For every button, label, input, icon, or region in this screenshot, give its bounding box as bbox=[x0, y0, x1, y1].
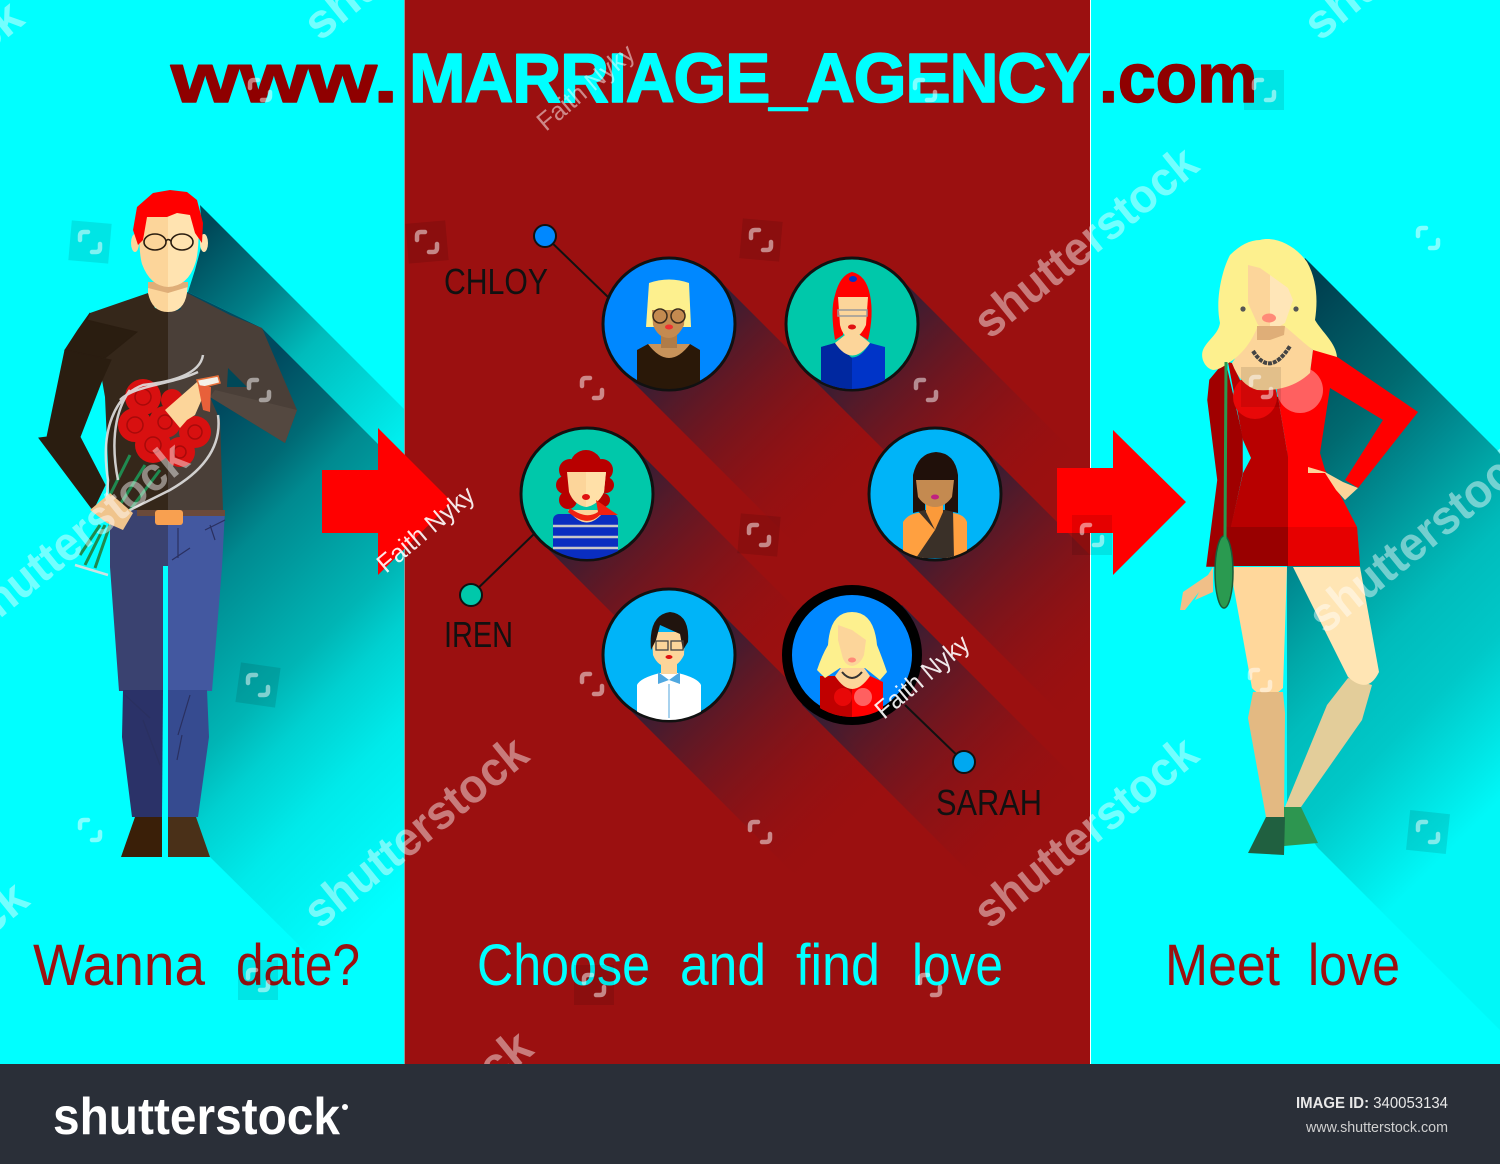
footer bar bbox=[0, 1064, 1500, 1164]
title: .com bbox=[1099, 39, 1257, 117]
label: Chloy: CHLOY bbox=[444, 261, 548, 302]
woman: hair bbox=[1202, 239, 1337, 370]
avatar: dark-haired woman bbox=[869, 428, 1001, 560]
caption: Meet love: love bbox=[1308, 933, 1400, 998]
man: hands and watch bbox=[90, 376, 220, 530]
caption: Wanna date?: date? bbox=[236, 933, 360, 998]
man: glasses bbox=[144, 234, 193, 250]
caption: Wanna date? bbox=[33, 933, 360, 998]
label: Sarah: SARAH bbox=[936, 782, 1042, 823]
arrow: left to centre bbox=[322, 428, 452, 575]
man: shoes bbox=[121, 817, 210, 857]
man: rose bouquet bbox=[75, 355, 219, 575]
figure: woman in red dress bbox=[1180, 239, 1418, 855]
avatar: man with glasses bbox=[603, 589, 735, 722]
avatar: Chloy bbox=[603, 258, 735, 392]
panel: left long shadow bbox=[168, 205, 405, 1050]
footer: registered mark bbox=[342, 1104, 348, 1110]
panel: right long shadow bbox=[1287, 258, 1500, 1030]
caption: Choose and find love: Choose bbox=[477, 933, 650, 998]
connector: Iren bbox=[460, 533, 535, 606]
woman: legs bbox=[1230, 567, 1379, 817]
panel: central dark red bbox=[405, 0, 1090, 1064]
woman: hand on hip bbox=[1308, 467, 1358, 500]
caption: Choose and find love bbox=[477, 933, 1003, 998]
woman: chest and neck bbox=[1232, 325, 1313, 390]
footer: logo: shutterstock bbox=[53, 1088, 340, 1146]
watermark: contributor name: Faith Nyky bbox=[869, 628, 975, 725]
figure: man with flowers bbox=[39, 190, 297, 857]
watermark: square stamps bbox=[68, 70, 1450, 1005]
man: jeans bbox=[110, 510, 225, 817]
arrow: centre to right bbox=[1057, 430, 1186, 575]
watermark: contributor name bbox=[371, 38, 975, 725]
caption: Choose and find love: and bbox=[680, 933, 766, 998]
connector: Sarah bbox=[905, 705, 975, 773]
watermark: stock text overlay: ck bbox=[468, 1020, 543, 1095]
caption: Meet love bbox=[1165, 933, 1400, 998]
watermark: contributor name: Faith Nyky bbox=[371, 480, 480, 579]
avatar: Sarah (selected) bbox=[787, 590, 917, 720]
watermark: stock text overlay: shutterstock bbox=[964, 136, 1209, 349]
label: Iren: IREN bbox=[444, 614, 513, 655]
avatar: Iren bbox=[521, 428, 653, 560]
title bbox=[170, 39, 1257, 117]
caption: Choose and find love: love bbox=[912, 933, 1003, 998]
woman: lower left hand bbox=[1180, 567, 1213, 610]
caption: Choose and find love: find bbox=[796, 933, 880, 998]
man: red hair bbox=[133, 190, 203, 245]
woman: shoes bbox=[1248, 807, 1318, 855]
woman: necklace bbox=[1253, 346, 1290, 363]
caption: Wanna date?: Wanna bbox=[33, 933, 206, 998]
watermark: stock text overlay: shutterstock bbox=[964, 726, 1209, 939]
footer: image id: IMAGE ID: 340053134 bbox=[1296, 1095, 1448, 1112]
woman: face bbox=[1240, 265, 1299, 340]
woman: dress bbox=[1207, 350, 1418, 566]
title: MARRIAGE_AGENCY bbox=[409, 39, 1089, 117]
man: sweater bbox=[39, 293, 297, 510]
title: www. bbox=[170, 39, 398, 117]
circle long shadows bbox=[548, 284, 1090, 840]
woman: bag strap bbox=[1225, 362, 1226, 540]
footer: website: www.shutterstock.com bbox=[1305, 1120, 1448, 1136]
avatar: red-haired woman bbox=[786, 258, 918, 392]
watermark: contributor name: Faith Nyky bbox=[531, 38, 640, 137]
connector: Chloy bbox=[534, 225, 608, 297]
man: belt and buckle bbox=[137, 510, 225, 525]
man: neck and face bbox=[131, 213, 208, 312]
caption: Meet love: Meet bbox=[1165, 933, 1280, 998]
woman: handbag bbox=[1215, 536, 1233, 608]
watermark: stock text overlay: shutterstock bbox=[294, 726, 539, 939]
